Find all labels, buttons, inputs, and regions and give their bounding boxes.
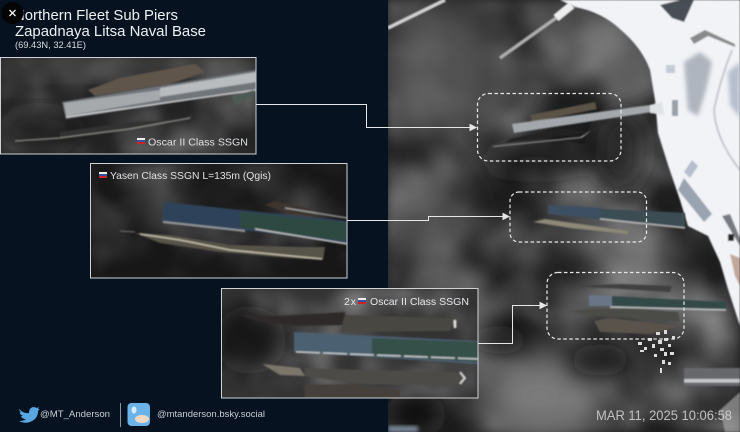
arrow: inset 3 to target 3 — [478, 302, 546, 344]
twitter handle: @MT_Anderson — [40, 409, 110, 420]
title: (69.43N, 32.41E) — [15, 40, 86, 51]
pier at lower right — [684, 368, 740, 432]
dashed box: target 2 — [510, 192, 646, 242]
target pier 2 with ship — [533, 205, 685, 234]
icon: bluesky avatar — [128, 403, 150, 426]
flag — [358, 298, 366, 304]
icon: bird — [19, 407, 40, 423]
flag — [137, 138, 145, 144]
floating ice — [638, 330, 675, 373]
inset label prefix: 2x — [344, 296, 357, 308]
arrow: inset 2 to target 2 — [347, 214, 509, 220]
broad cloud shapes — [370, 0, 680, 432]
land with snow — [560, 0, 740, 326]
pier stubs at the top — [388, 0, 572, 58]
timestamp: MAR 11, 2025 10:06:58 — [596, 408, 732, 423]
flag — [99, 172, 107, 178]
inset label: Oscar II Class SSGN — [370, 296, 469, 308]
title — [14, 8, 206, 51]
target pier 3 with ships — [567, 284, 726, 334]
forest on snow — [684, 52, 740, 118]
dashed box: target 3 — [547, 272, 684, 339]
inset: Oscar II Class SSGN — [0, 53, 256, 154]
bluesky handle: @mtanderson.bsky.social — [157, 409, 265, 420]
land bottom corner — [388, 426, 418, 432]
satellite image of the base — [370, 0, 740, 432]
inset label: Oscar II Class SSGN — [148, 136, 248, 148]
inset: 2x Oscar II Class SSGN — [214, 288, 478, 398]
inset label: Yasen Class SSGN L=135m (Qgis) — [110, 170, 271, 182]
title: Zapadnaya Litsa Naval Base — [15, 24, 206, 40]
icon: close button — [2, 2, 24, 24]
dashed box: target 1 — [478, 94, 621, 161]
inset: Yasen Class SSGN — [90, 163, 347, 278]
title: Northern Fleet Sub Piers — [14, 8, 178, 24]
divider — [120, 403, 121, 427]
footer credits — [19, 403, 265, 427]
arrow: inset 1 to target 1 — [256, 104, 476, 130]
target pier 1 with ships — [492, 102, 664, 147]
